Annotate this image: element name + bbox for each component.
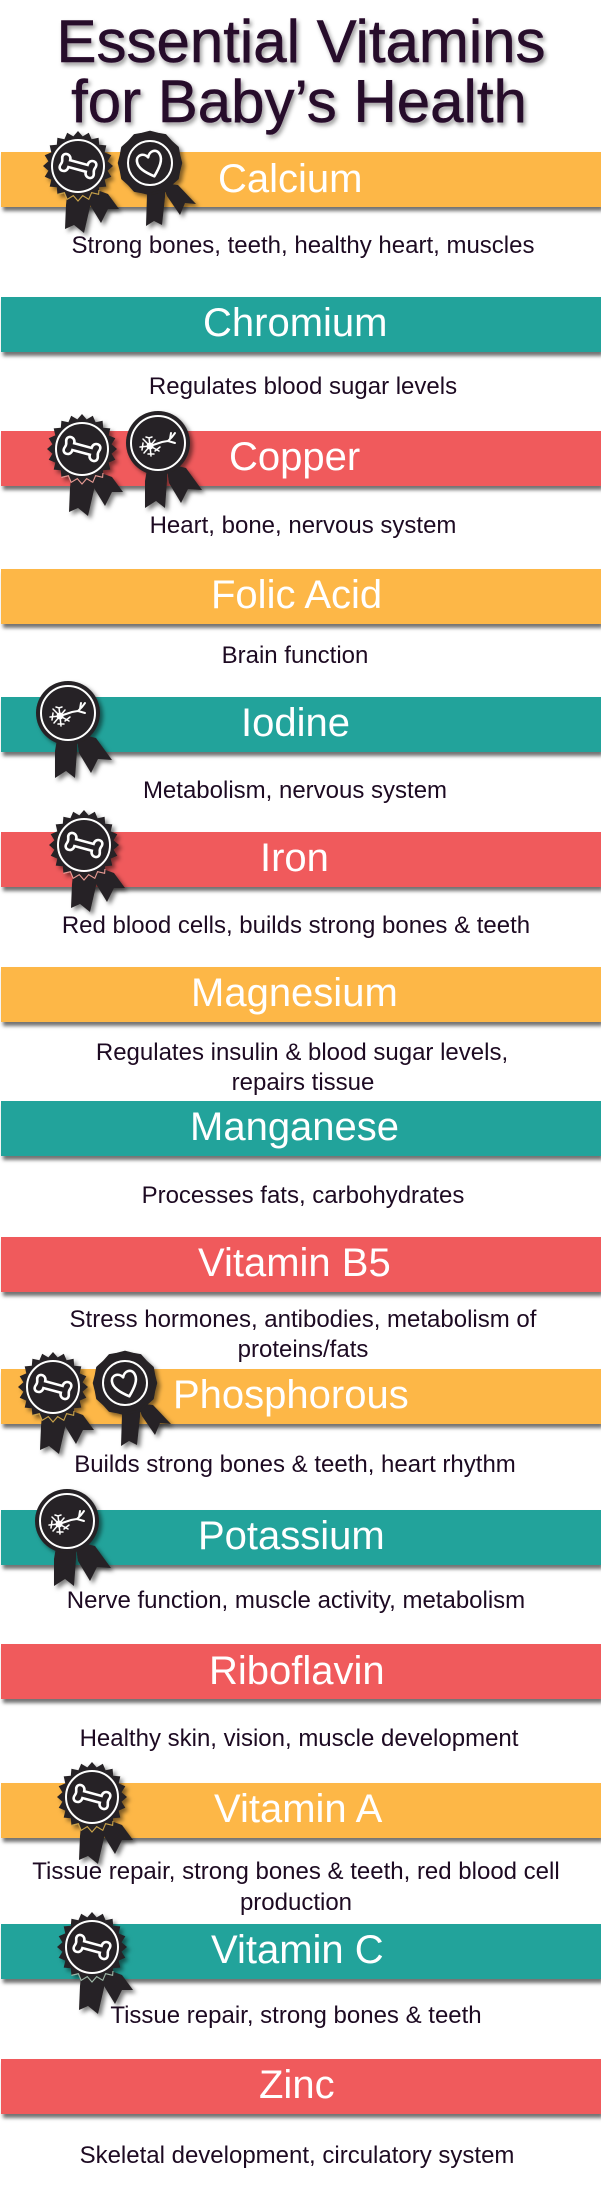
panel: Vitamin C (1, 1912, 601, 2029)
bar (1, 297, 601, 352)
name: Zinc (259, 2063, 335, 2107)
bar (1, 1369, 601, 1424)
description: Healthy skin, vision, muscle development (80, 1725, 519, 1752)
title: Essential Vitamins (56, 8, 546, 75)
name: Calcium (218, 157, 362, 201)
icon: bone ribbon (57, 1912, 133, 2014)
panel: Potassium (1, 1489, 601, 1614)
panel: Phosphorous (1, 1352, 601, 1478)
name: Phosphorous (173, 1373, 409, 1417)
bar (1, 1783, 601, 1838)
panel: Riboflavin (1, 1644, 601, 1752)
name: Magnesium (191, 971, 398, 1015)
name: Iodine (241, 701, 350, 745)
description: Tissue repair, strong bones & teeth (110, 2002, 482, 2029)
panel: Copper (1, 411, 601, 539)
description: Regulates blood sugar levels (149, 373, 457, 400)
bar (1, 967, 601, 1022)
description line 2: repairs tissue (232, 1069, 374, 1096)
panel: Magnesium (1, 967, 601, 1096)
icon: bone ribbon (57, 1762, 133, 1864)
icon: bone ribbon (47, 414, 123, 516)
panel: Vitamin A (1, 1762, 601, 1916)
name: Vitamin C (211, 1928, 384, 1972)
panel: Calcium (1, 131, 601, 259)
description line 2: production (240, 1889, 352, 1916)
description: Heart, bone, nervous system (150, 512, 456, 539)
title: for Baby’s Health (71, 68, 527, 135)
name: Chromium (203, 301, 387, 345)
name: Copper (229, 435, 360, 479)
name: Vitamin A (214, 1787, 383, 1831)
description: Metabolism, nervous system (143, 777, 447, 804)
name: Riboflavin (209, 1649, 385, 1693)
description: Regulates insulin & blood sugar levels, (96, 1039, 508, 1066)
panel: Iron (1, 810, 601, 939)
icon: heart ribbon (94, 1352, 171, 1446)
panel: Iodine (1, 681, 601, 804)
icon: heart ribbon (119, 132, 196, 226)
panel: Vitamin B5 (1, 1237, 601, 1363)
icon: neuron ribbon (126, 411, 202, 508)
name: Iron (260, 836, 329, 880)
panel: Manganese (1, 1101, 601, 1209)
bar (1, 832, 601, 887)
icon: neuron ribbon (35, 1489, 111, 1586)
bar (1, 1101, 601, 1156)
bar (1, 697, 601, 752)
title (56, 8, 546, 135)
description: Brain function (222, 642, 368, 669)
description line 2: proteins/fats (238, 1336, 368, 1363)
description: Builds strong bones & teeth, heart rhythm (74, 1451, 516, 1478)
bar (1, 2059, 601, 2114)
icon: neuron ribbon (36, 681, 112, 778)
bar (1, 1644, 601, 1699)
bar (1, 431, 601, 486)
bar (1, 1924, 601, 1979)
icon: bone ribbon (18, 1352, 94, 1454)
bar (1, 569, 601, 624)
description: Red blood cells, builds strong bones & teeth (62, 912, 530, 939)
description: Nerve function, muscle activity, metabolism (67, 1587, 525, 1614)
panel: Zinc (1, 2059, 601, 2169)
bar (1, 1237, 601, 1292)
description: Strong bones, teeth, healthy heart, muscles (72, 232, 534, 259)
bar (1, 152, 601, 207)
description: Tissue repair, strong bones & teeth, red blood cell (32, 1858, 560, 1885)
description: Processes fats, carbohydrates (142, 1182, 464, 1209)
name: Vitamin B5 (198, 1241, 391, 1285)
name: Manganese (190, 1105, 399, 1149)
description: Skeletal development, circulatory system (80, 2142, 514, 2169)
panel: Chromium (1, 297, 601, 400)
panel: Folic Acid (1, 569, 601, 669)
description: Stress hormones, antibodies, metabolism of (70, 1306, 537, 1333)
bar (1, 1510, 601, 1565)
name: Folic Acid (211, 573, 382, 617)
name: Potassium (198, 1514, 385, 1558)
icon: bone ribbon (43, 131, 119, 233)
icon: bone ribbon (49, 810, 125, 912)
